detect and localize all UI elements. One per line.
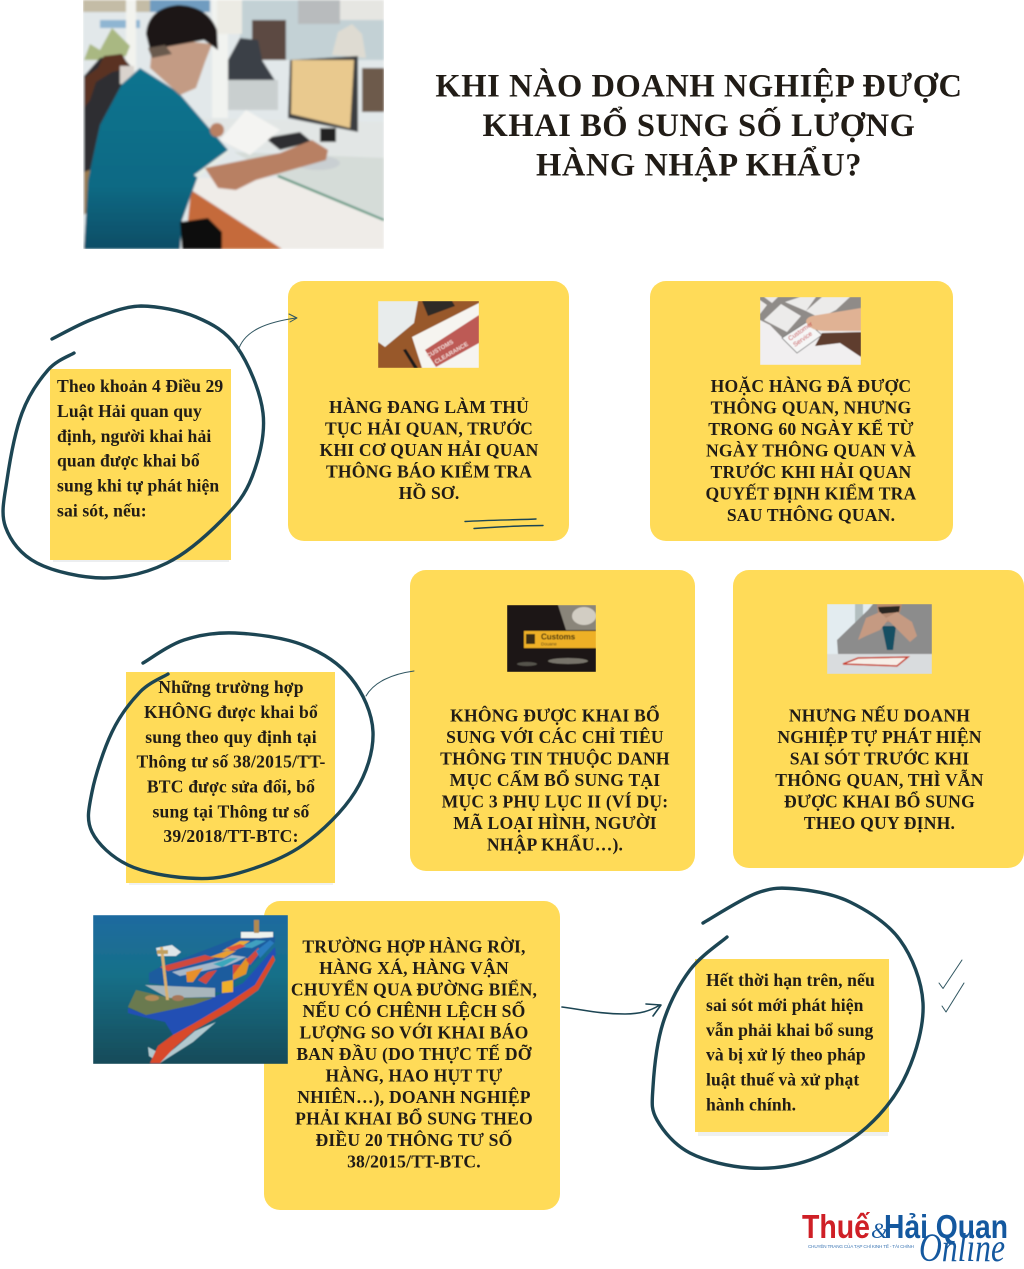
text: card 5: NẾU CÓ CHÊNH LỆCH SỐ	[303, 1001, 525, 1021]
panel: exclusions note	[126, 672, 335, 885]
panel: card 1	[288, 281, 569, 541]
text: card 1: KHI CƠ QUAN HẢI QUAN	[319, 440, 539, 460]
connector: exclusions note to card 3	[366, 671, 414, 696]
panel: legal basis note	[50, 369, 231, 562]
underline scribble	[465, 519, 543, 528]
text: exclusions: KHÔNG được khai bổ	[144, 702, 318, 722]
text: exclusions: Thông tư số 38/2015/TT-	[136, 752, 326, 772]
text: card 5: NHIÊN…), DOANH NGHIỆP	[297, 1087, 531, 1107]
icon: check marks	[939, 960, 964, 1012]
text: card 1: HỒ SƠ.	[399, 483, 459, 503]
text: card 2: TRƯỚC KHI HẢI QUAN	[711, 462, 912, 482]
panel: card 4	[733, 570, 1024, 868]
text: legal basis: sai sót, nếu:	[57, 500, 147, 520]
text: card 3: MỤC CẤM BỔ SUNG TẠI	[450, 770, 660, 790]
text: exclusions: sung theo quy định tại	[145, 727, 317, 747]
text: card 5: TRƯỜNG HỢP HÀNG RỜI,	[302, 936, 526, 956]
text: exclusions	[136, 677, 326, 846]
title: KHI NÀO DOANH NGHIỆP ĐƯỢC	[435, 68, 963, 104]
text: exclusions: sung tại Thông tư số	[152, 802, 310, 822]
text: card 5: 38/2015/TT-BTC.	[347, 1152, 481, 1172]
text: card 3: KHÔNG ĐƯỢC KHAI BỔ	[450, 706, 660, 726]
text: exclusions: 39/2018/TT-BTC:	[163, 826, 299, 846]
text: card 1	[319, 397, 539, 503]
photo: customs clearance: CLEARANCE	[434, 342, 470, 366]
text: card 5: LƯỢNG SO VỚI KHAI BÁO	[299, 1022, 529, 1042]
text: card 2	[706, 376, 917, 525]
text: exclusions: BTC được sửa đổi, bổ	[147, 776, 315, 796]
text: deadline: Hết thời hạn trên, nếu	[706, 970, 875, 990]
hand-drawn circle 1	[3, 306, 264, 578]
text: card 4	[775, 706, 984, 833]
photo: customer service key	[760, 297, 861, 365]
text: card 5: ĐIỀU 20 THÔNG TƯ SỐ	[315, 1130, 513, 1150]
text: card 2: SAU THÔNG QUAN.	[727, 505, 895, 525]
text: legal basis: sung khi tự phát hiện	[57, 476, 219, 496]
text: card 5: BAN ĐẦU (DO THỰC TẾ DỠ	[296, 1044, 532, 1064]
text: card 3: MỤC 3 PHỤ LỤC II (VÍ DỤ:	[442, 792, 668, 812]
arrow: card 5 to deadline note	[562, 1004, 661, 1016]
text: card 3: THÔNG TIN THUỘC DANH	[440, 748, 670, 768]
photo: customs sign: Douane	[541, 642, 557, 646]
text: exclusions: Những trường hợp	[158, 677, 304, 697]
text: deadline: luật thuế và xử phạt	[706, 1070, 859, 1090]
text: deadline: và bị xử lý theo pháp	[706, 1044, 866, 1064]
logo: Thuế & Hải Quan Online: CHUYÊN TRANG CỦA TẠP CHÍ KINH TẾ - TÀI CHÍNH	[808, 1242, 914, 1249]
text: card 2: HOẶC HÀNG ĐÃ ĐƯỢC	[711, 376, 911, 396]
title	[435, 68, 963, 184]
text: deadline	[706, 970, 875, 1114]
text: card 4: THEO QUY ĐỊNH.	[804, 813, 955, 833]
text: card 1: TỤC HẢI QUAN, TRƯỚC	[325, 418, 533, 438]
logo: Thuế & Hải Quan Online	[802, 1208, 1008, 1269]
photo: customer service key: Service	[792, 330, 814, 349]
text: deadline: vẫn phải khai bổ sung	[706, 1020, 873, 1040]
text: card 5: CHUYỂN QUA ĐƯỜNG BIỂN,	[291, 980, 537, 1000]
hand-drawn circle 2	[88, 633, 373, 879]
panel: card 5	[264, 901, 560, 1210]
panel: deadline note	[695, 959, 889, 1136]
text: card 3: MÃ LOẠI HÌNH, NGƯỜI	[453, 813, 657, 833]
text: card 2: TRONG 60 NGÀY KỂ TỪ	[708, 419, 914, 439]
text: deadline: hành chính.	[706, 1094, 796, 1114]
text: card 5: HÀNG, HAO HỤT TỰ	[326, 1066, 502, 1086]
text: legal basis	[57, 376, 223, 520]
text: card 4: NGHIỆP TỰ PHÁT HIỆN	[777, 727, 982, 747]
text: card 3	[440, 706, 670, 854]
photo: customs clearance: CUSTOMS	[426, 340, 455, 360]
photo: customs clearance	[378, 301, 479, 368]
text: legal basis: định, người khai hải	[57, 426, 211, 446]
text: card 5	[291, 936, 537, 1172]
text: card 1: THÔNG BÁO KIỂM TRA	[326, 462, 532, 482]
photo: customs sign	[507, 605, 596, 672]
panel: card 2	[650, 281, 953, 541]
hand-drawn circle 3	[652, 888, 923, 1168]
text: card 4: NHƯNG NẾU DOANH	[789, 706, 970, 726]
text: legal basis: quan được khai bổ	[57, 450, 200, 470]
photo: container ship	[93, 915, 288, 1064]
logo: Thuế & Hải Quan Online: Thuế	[802, 1208, 871, 1245]
logo: Thuế & Hải Quan Online: &	[871, 1218, 889, 1243]
text: card 1: HÀNG ĐANG LÀM THỦ	[329, 397, 529, 417]
photo: customer service key: Customer	[787, 320, 815, 343]
text: card 3: NHẬP KHẨU…).	[487, 834, 623, 854]
text: card 5: PHẢI KHAI BỔ SUNG THEO	[295, 1108, 533, 1128]
panel: card 3	[410, 570, 695, 871]
title: HÀNG NHẬP KHẨU?	[536, 148, 862, 184]
text: card 2: QUYẾT ĐỊNH KIỂM TRA	[706, 484, 917, 504]
text: deadline: sai sót mới phát hiện	[706, 995, 864, 1015]
text: card 4: ĐƯỢC KHAI BỔ SUNG	[784, 792, 975, 812]
text: card 4: THÔNG QUAN, THÌ VẪN	[775, 770, 984, 790]
text: card 2: THÔNG QUAN, NHƯNG	[711, 398, 911, 418]
photo: customs officer counter	[83, 0, 384, 249]
text: card 2: NGÀY THÔNG QUAN VÀ	[706, 440, 916, 460]
text: card 5: HÀNG XÁ, HÀNG VẬN	[319, 958, 509, 978]
photo: businessman checking document	[827, 604, 932, 674]
title: KHAI BỔ SUNG SỐ LƯỢNG	[483, 107, 915, 144]
text: card 4: SAI SÓT TRƯỚC KHI	[790, 748, 969, 768]
arrow: note to first card	[238, 314, 297, 351]
photo: customs sign: Customs	[541, 632, 576, 642]
text: card 3: SUNG VỚI CÁC CHỈ TIÊU	[446, 727, 664, 747]
text: legal basis: Theo khoản 4 Điều 29	[57, 376, 223, 396]
text: legal basis: Luật Hải quan quy	[57, 401, 202, 421]
